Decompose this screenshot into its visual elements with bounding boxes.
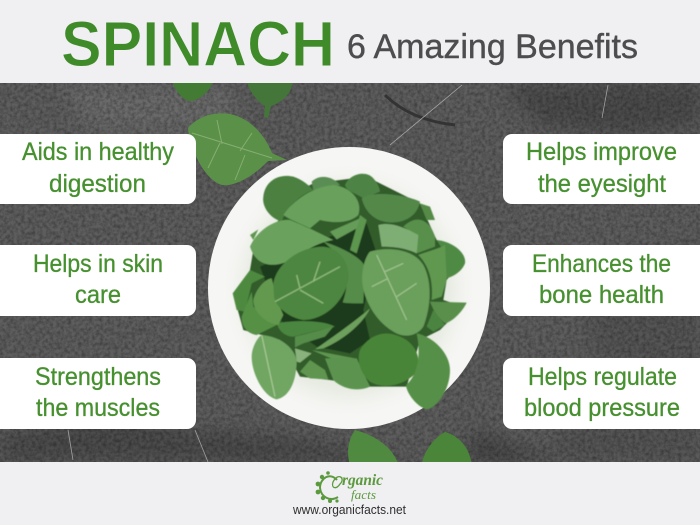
benefit box: Helps in skin care: care (75, 281, 121, 309)
benefit box: Aids in healthy digestion: Aids in healthy (22, 138, 174, 166)
footer band (0, 462, 700, 525)
benefit box: Helps regulate blood pressure: Helps regulate (528, 363, 677, 391)
title: SPINACH: SPINACH (61, 8, 335, 80)
benefit box: Helps in skin care (0, 245, 196, 316)
logo icon: leaf swirl (316, 471, 342, 503)
benefit box: Strengthens the muscles: the muscles (36, 394, 160, 422)
bowl (208, 147, 490, 429)
mid leaves (250, 185, 447, 325)
header band (0, 0, 700, 83)
benefit box: Helps improve the eyesight: Helps improve (526, 138, 677, 166)
dark gaps between leaves (260, 223, 377, 353)
benefit box: Strengthens the muscles (0, 358, 196, 429)
bowl: inner shadow (241, 182, 457, 398)
logo text: rganic: rganic (342, 472, 383, 489)
benefit box: Helps regulate blood pressure: blood pressure (524, 394, 680, 422)
benefit box: Helps regulate blood pressure (503, 358, 700, 429)
benefit box: Helps in skin care: Helps in skin (33, 250, 163, 278)
leaf: top clipped right (247, 83, 292, 118)
website url: www.organicfacts.net (292, 503, 407, 517)
benefit box: Aids in healthy digestion (0, 134, 196, 204)
benefit box: Aids in healthy digestion: digestion (49, 170, 146, 198)
leaves scattered on the table (172, 80, 472, 470)
leaf: bottom clipped right (422, 432, 472, 462)
logo: Organic Facts (316, 471, 383, 503)
subtitle: 6 Amazing Benefits: 6 Amazing Benefits (347, 28, 638, 66)
leaf: top clipped left (173, 83, 213, 101)
benefit box: Enhances the bone health (503, 245, 700, 316)
leaf: large upper left (188, 113, 287, 185)
benefit box: Enhances the bone health: bone health (539, 281, 664, 309)
front leaves (252, 247, 450, 409)
benefit box: Strengthens the muscles: Strengthens (35, 363, 161, 391)
spinach pile (233, 174, 467, 409)
background: dark stone surface (0, 83, 700, 462)
benefit box: Helps improve the eyesight: the eyesight (538, 170, 666, 198)
leaf: bottom clipped left (348, 430, 398, 462)
back leaves (233, 174, 467, 379)
benefit box: Enhances the bone health: Enhances the (532, 250, 671, 278)
benefit box: Helps improve the eyesight (503, 134, 700, 204)
logo text: facts: facts (351, 487, 376, 502)
pile backing (235, 177, 463, 387)
bowl: white plate (208, 147, 490, 429)
